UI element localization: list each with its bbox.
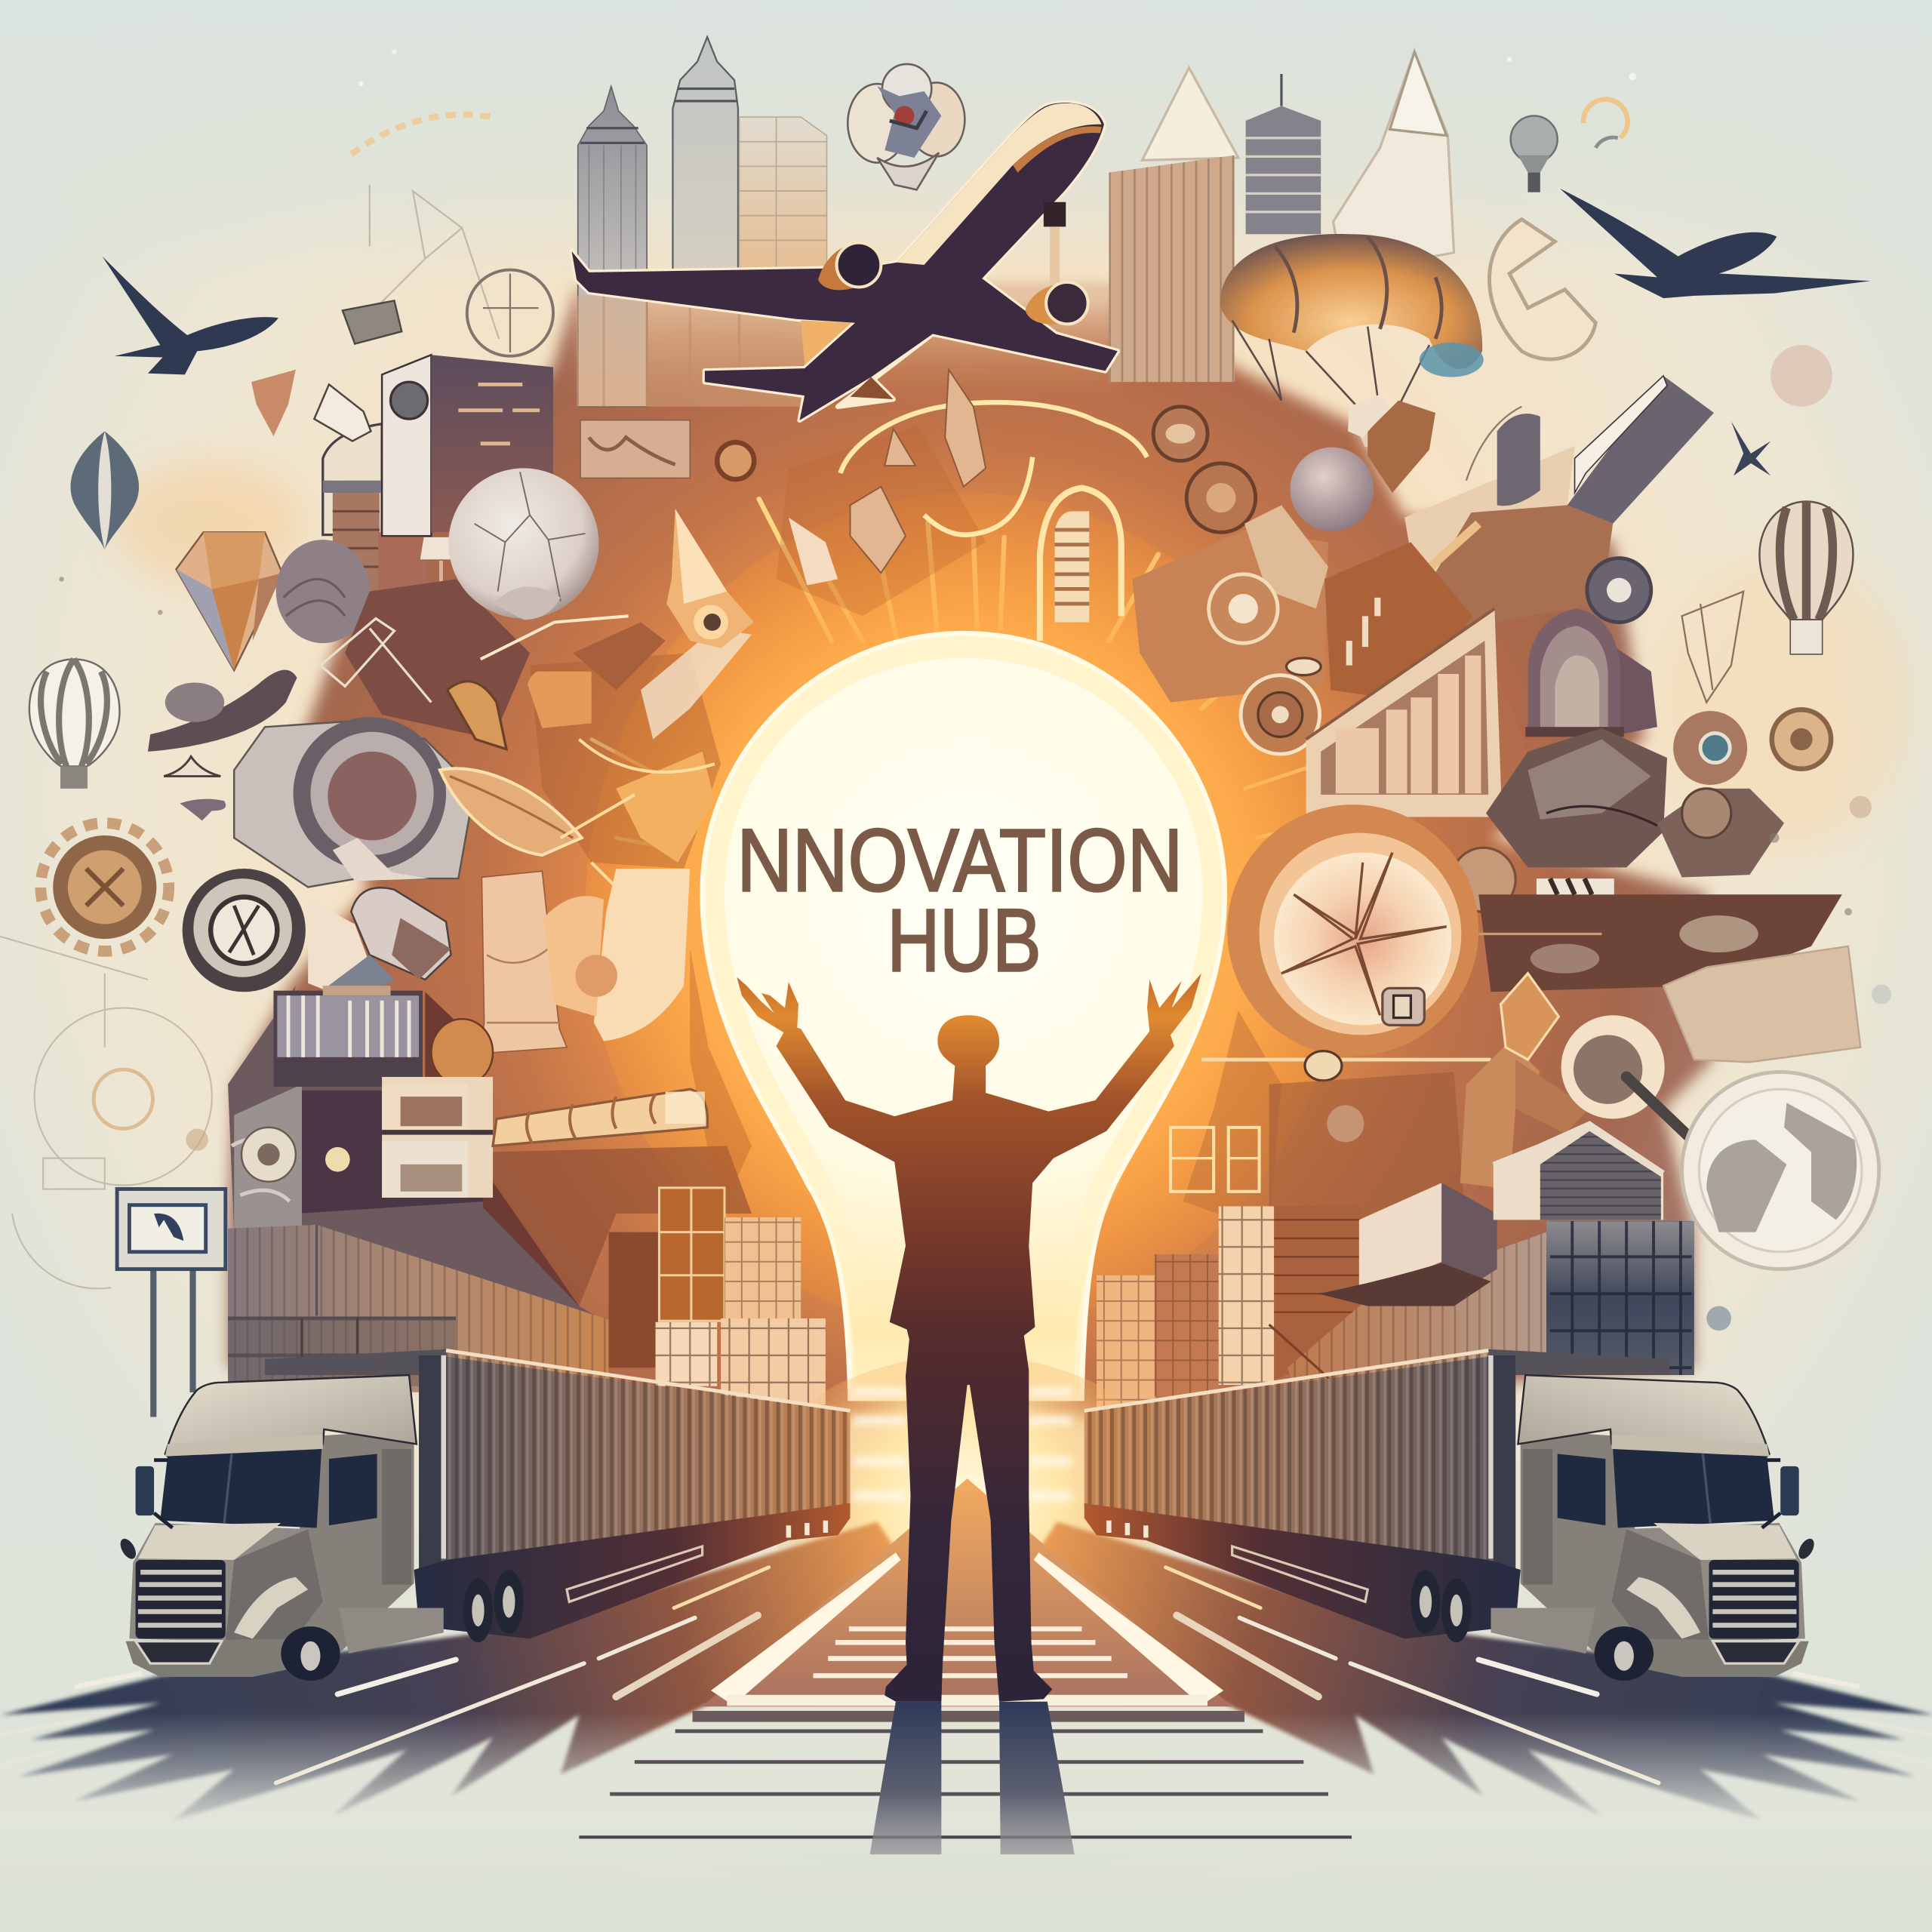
shaded collage tones around bulb	[493, 425, 1281, 1306]
mallet	[1561, 1015, 1712, 1158]
person silhouette	[737, 974, 1201, 1702]
road markings left	[0, 1567, 769, 1783]
confetti dots	[59, 49, 1891, 1331]
globe left	[448, 468, 598, 620]
pale disc right	[1770, 345, 1832, 407]
bulb title	[737, 811, 1183, 990]
bulb title: HUB	[888, 891, 1041, 990]
ground fade	[0, 1712, 1932, 1829]
cylinders left of bulb	[481, 869, 690, 1054]
light bulb	[703, 633, 1225, 1398]
compass right	[1227, 804, 1478, 1056]
small plane left	[103, 257, 278, 374]
lantern center top	[1040, 488, 1121, 641]
oval pods and wires	[440, 622, 752, 924]
balloon top right	[1511, 115, 1558, 192]
rubble heaps right	[1451, 728, 1784, 912]
buildings lower right of bulb	[1097, 1206, 1361, 1408]
crosswalk	[579, 1478, 1352, 1837]
striped balloon right	[1759, 501, 1854, 654]
big block right	[1404, 376, 1714, 629]
top floating emblem	[848, 64, 964, 189]
bulb title: NNOVATION	[737, 811, 1183, 909]
street sign left	[117, 1189, 226, 1417]
striped balloon left	[29, 659, 119, 789]
gem left	[176, 532, 282, 670]
capsule left	[308, 888, 451, 998]
chassis left	[414, 1503, 851, 1642]
warehouse right	[1269, 1183, 1546, 1386]
pale letter shape right	[1489, 220, 1595, 359]
ring gear left	[183, 869, 306, 992]
sketch ring top right	[1583, 100, 1628, 148]
lower orange collage right	[1171, 1051, 1491, 1232]
faint sketch lines top left	[351, 115, 553, 356]
cap and machinery left	[148, 670, 475, 888]
gear cluster right	[1241, 558, 1831, 785]
world globe right	[1682, 1072, 1879, 1269]
skyline right	[1109, 52, 1454, 382]
central collage mass	[228, 286, 1712, 1417]
dark wall lower left	[228, 986, 610, 1324]
ground and road left	[0, 1521, 900, 1821]
stripe box left	[273, 986, 423, 1087]
arched door right	[1525, 609, 1657, 737]
container left	[265, 1349, 851, 1577]
cab left	[117, 1375, 444, 1681]
dark building left	[323, 355, 553, 659]
bird icon right	[1731, 421, 1770, 475]
dark kite balloon left	[71, 431, 139, 549]
orange glow behind bulb	[586, 493, 1349, 1331]
ground and road right	[1035, 1521, 1932, 1821]
pale cracked patch right	[1663, 946, 1860, 1062]
faint sketch lines lower left	[0, 937, 212, 1288]
road markings right	[1165, 1567, 1932, 1783]
gear icon left	[41, 823, 169, 951]
central left objects	[580, 420, 838, 648]
warehouse panel right	[1306, 609, 1502, 817]
lavender textured mound left	[276, 540, 629, 740]
sketch leaf right	[1682, 592, 1743, 703]
person shadow	[870, 1702, 1075, 1854]
arm and club right	[1460, 974, 1589, 1189]
building and house right	[1494, 1124, 1694, 1375]
office blocks left	[242, 1077, 493, 1198]
dark banded strip right	[1478, 878, 1842, 992]
warehouse left	[228, 1225, 609, 1398]
small plane right	[1560, 189, 1870, 298]
light rays from bulb	[592, 499, 1318, 851]
left small objects	[251, 300, 401, 441]
truck left	[117, 1349, 851, 1681]
light arcs center top	[840, 370, 1147, 573]
horizon glow	[758, 1355, 1177, 1626]
parachute	[1220, 234, 1484, 448]
buildings lower left of bulb	[609, 1188, 826, 1404]
truck right	[1084, 1349, 1817, 1681]
orange stone	[431, 1019, 493, 1085]
airplane	[572, 103, 1118, 420]
tube	[493, 1089, 708, 1146]
rubble top right of collage	[1132, 394, 1472, 703]
skyline left	[577, 37, 827, 407]
